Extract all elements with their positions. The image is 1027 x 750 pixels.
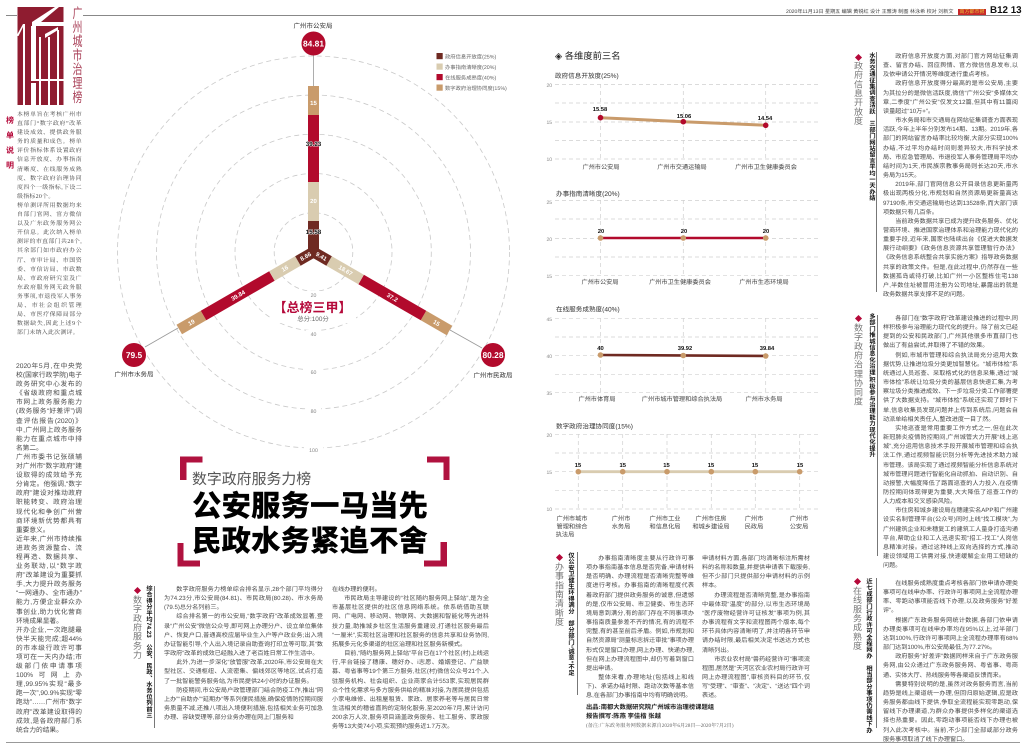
body text: 需要特别说明的是,虽然对政务服务而言,当前趋势是线上渠道统一办理,但回归原始逻辑,应是政务服务都由线下提供,争取全流程能实现零跑动,保留线下办理渠道,为群众办事提供多样化的渠道选择也热重要。因此,零跑动事项能否线下办理也被列入此次考核中。当前,不少部门全部或部分政务服务事项取消了线下办理窗口。 bbox=[883, 681, 1018, 743]
chart: 政府信息开放度: 广州市交通运输局 bbox=[657, 163, 707, 171]
bottom rule bbox=[6, 742, 1020, 743]
chart: 数字政府治理协同度: 公安局 bbox=[790, 522, 808, 530]
corner brackets bbox=[178, 456, 450, 566]
chart: 政府信息开放度: 政府信息开放度(25%) bbox=[555, 72, 619, 80]
source credits: 报告撰写:陈燕 李佳楷 张越 bbox=[586, 713, 661, 720]
chart: 政府信息开放度: 20 bbox=[546, 83, 552, 89]
body text: 例如,市城市管理和综合执法局充分运用大数据优势,让推进垃圾分类更加智慧化。“城市体检”系统通过人员巡查、采取格式化的信息采集,通过“城市体检”系统让垃圾分类的基层信息快速汇集,为考察垃圾分类推进成效、下一步垃圾分类工作部署提供了大数据支持。“城市体检”系统还实现了即时下单,信息收集员发现问题并上传到系统后,问题会自动派单给相关责任人,整改进度一目了然。 bbox=[883, 352, 1018, 423]
text block: ranking notes bbox=[17, 111, 82, 336]
body text: 在线服务成熟度重点考核各部门依申请办理类事项可在线申办率、行政许可事项网上全流程办理率、零跑动事项能否线下办理,以及政务服务“好差评”。 bbox=[883, 580, 1018, 614]
arm: 民政局 bbox=[311, 247, 452, 335]
chart: 数字政府治理协同度: 20 bbox=[546, 433, 552, 439]
masthead vertical title: 广州城市治理榜 bbox=[71, 6, 82, 104]
arm: 水务局: 39.84 bbox=[230, 289, 247, 303]
chart: 办事指南清晰度: 20 bbox=[598, 228, 604, 235]
body text column 2: 在线办理的便利。 bbox=[332, 586, 381, 593]
top rule bbox=[83, 15, 1020, 16]
score bubble: 民政局: 广州市民政局 bbox=[474, 372, 512, 380]
section subhead: 近七成部门行政许可全程网办 相当部分事项仍需线下办 bbox=[865, 578, 872, 733]
body text column 2 bbox=[332, 586, 489, 730]
body text column 1: 综合排名第一的市公安局,“数字政府”改革成效显著,登录“广州公安”微信公众号,即可网上办理分户、设立单位集体户、恢复户口,普通高校应届毕业生入户等户政业务;出入境办证智能引导,个人出入境记录自助查询打印立等可取,其“数字政府”改革的成效已经融入进了老百姓日常工作生活中。 bbox=[164, 613, 323, 657]
score bubble: 公安局: 84.81 bbox=[303, 38, 324, 48]
rule bbox=[876, 52, 877, 292]
chart: 数字政府治理协同度: 和信息化局 bbox=[650, 522, 680, 530]
body text column 2: 办理流程是否清晰完整,是办事指南中最体现“温度”的部分,以市生态环境局“医疗废物经营许可证核发”事项为例,其办事流程有文字和流程图两个版本,每个环节具体内容清晰明了,并注明各环节申请办结时限,最后相关决定书送达方式也清晰列出。 bbox=[702, 592, 810, 654]
chart centre label: 总分:100分 bbox=[297, 315, 329, 323]
score bubble: 公安局: 广州市公安局 bbox=[294, 22, 332, 30]
chart: 数字政府治理协同度: 管理和综合 bbox=[557, 522, 587, 530]
ring labels: 60 bbox=[311, 370, 316, 376]
chart centre label bbox=[272, 299, 356, 323]
chart: 数字政府治理协同度: 10 bbox=[546, 507, 552, 513]
arm: 水务局 bbox=[177, 247, 316, 334]
arm: 公安局: 15 bbox=[310, 100, 317, 107]
chart: 办事指南清晰度: 15 bbox=[546, 274, 552, 280]
chart: 数字政府治理协同度: 广州市 bbox=[745, 514, 763, 522]
chart: 政府信息开放度: 15.06 bbox=[677, 113, 692, 120]
chart: 办事指南清晰度: 广州市卫生健康委员会 bbox=[649, 278, 711, 286]
chart: 办事指南清晰度 bbox=[546, 190, 821, 286]
body text column 1 bbox=[164, 586, 323, 721]
chart: 在线服务成熟度: 45 bbox=[546, 317, 552, 323]
body text column 2 bbox=[702, 554, 810, 699]
side label: 榜单说明: 榜单说明 bbox=[6, 116, 14, 170]
chart: 在线服务成熟度: 广州市水务局 bbox=[745, 395, 783, 403]
chart: 办事指南清晰度: 办事指南清晰度(20%) bbox=[556, 190, 620, 198]
chart: 在线服务成熟度: 39.84 bbox=[760, 345, 775, 352]
body text: 实地巡查是常用重要工作方式之一,但在此次新冠肺炎疫情防控期间,广州城管大力开展“线上巡城”,充分运用信息技术手段开展城市管理和综合执法工作,通过视频智能识别分析等先进技术助力城市管理。该局实现了通过视频智能分析信息系统对城市管理问题进行智能化自动抓拍、自动识别、自动报警,大幅度降低了路面巡查的人力投入,在疫情防控期间体现得更为重要,大大降低了巡查工作的人力成本和交叉感染风险。 bbox=[883, 425, 1018, 505]
panel: 数字政府服务力 bbox=[132, 585, 489, 730]
section label: 在线服务成熟度 bbox=[852, 586, 862, 650]
score bubble: 水务局 bbox=[114, 343, 154, 378]
arm: 民政局: 15 bbox=[432, 319, 441, 328]
score bubble: 水务局: 79.5 bbox=[126, 350, 142, 360]
page header: red tag: 南方都市报 bbox=[959, 8, 984, 14]
body text column 1: 办事指南清晰度主要从行政许可事项办事指南基本信息是否完备,申请材料是否明确、办理流程是否清晰完整等维度进行考核。办事指南的清晰程度代表着政府部门提供政务服务的诚意,但遗憾的是,仅市公安局、市卫健委、市生态环境局意到满分,有的部门存在不同事项办事指南质量参差不齐的情况,有的流程不完整,有的甚至前后矛盾。例如,市规划和自然资源局“测量标志拆迁审批”事项办理形式仅是窗口办理,网上办理、快递办理,但在网上办理流程图中,却仍写着到窗口提出申请。 bbox=[586, 555, 694, 672]
panel: 在线服务成熟度 bbox=[852, 578, 1018, 743]
chart: 在线服务成熟度 bbox=[546, 306, 821, 403]
section subhead: 水务交通征集调查活跃 三部门网站留言平均一天办结 bbox=[868, 52, 875, 201]
body text: 当前政务数据共享已成为提升政务服务、优化营商环境、推进国家治理体系和治理能力现代化的重要手段,近年来,国家也陆续出台《促进大数据发展行动纲要》《政务信息资源共享管理暂行办法》《政务信息系统整合共享实施方案》指导政务数据共享的政策文件。但是,在此过程中,仍然存在一些数据孤岛或待打破,比如广州一小区整栋住宅138户,半数住址被冒用注册为公司地址,暴露出的就是政务数据共享支撑不足的问题。 bbox=[883, 218, 1018, 298]
masthead logo bbox=[18, 7, 64, 105]
arm: 水务局: 8.66 bbox=[299, 251, 313, 263]
chart: 数字政府治理协同度: 执法局 bbox=[556, 530, 574, 538]
body text: 政府信息开放度方面,对部门官方网站征集调查、留言办结、回应舆情、官方微信信息发布,以及依申请公开情况等维度进行重点考核。 bbox=[883, 53, 1018, 78]
body text column 1: 防疫期间,市公安局户政管理部门结合防疫工作,推出“网上办”“自助办”“延期办”等系列便民措施,确保疫情防控期间服务质量不减,还推八项出入境便利措施,包括相关业务可加急办理、容缺受理等,部分业务办理在网上门服务和 bbox=[164, 687, 323, 721]
marker bbox=[556, 554, 563, 561]
chart centre label: 【总榜三甲】 bbox=[273, 300, 352, 315]
source credits: 出品:南都大数据研究院广州城市治理榜课题组 bbox=[586, 704, 714, 711]
text block: intro bbox=[16, 362, 82, 734]
chart: 数字政府治理协同度: 广州市 bbox=[612, 514, 630, 522]
arm: 民政局: 18.67 bbox=[337, 264, 354, 278]
score bubble: 水务局: 广州市水务局 bbox=[114, 370, 154, 378]
chart: 政府信息开放度: 广州市卫生健康委员会 bbox=[735, 163, 797, 171]
chart: 数字政府治理协同度: 15 bbox=[546, 470, 552, 476]
section title: 各维度前三名: ◈ 各维度前三名 bbox=[555, 51, 621, 61]
chart: 政府信息开放度: 广州市公安局 bbox=[582, 163, 620, 171]
rule bbox=[577, 552, 578, 695]
text block: intro: 近年来,广州市持续推进政务资源整合、流程再造、数据共享、业务联动,以“数字政府”改革建设为重要抓手,大力提升政务服务“一网通办、全市通办”能力,方便企业群众办事创业,助力优化营商环境成果显著。 bbox=[16, 536, 82, 625]
headline main bbox=[192, 490, 428, 558]
score bubble: 民政局 bbox=[474, 343, 512, 380]
chart: 数字政府治理协同度: 民政局 bbox=[745, 522, 763, 530]
body text: 2019年,部门官网信息公开目录信息更新量两极出现两极分化,市规划和自然资源局更新量高达97190条,市交通运输局也达到13528条,而大部门该项数据只有几百条。 bbox=[883, 181, 1018, 216]
body text column 1: 整体来看,办理地址(包括线上和线下)、承诺办结时限、跑动次数等基本信息,在各部门办事指南中均有明确说明。 bbox=[586, 674, 694, 699]
chart: 在线服务成熟度: 广州市体育局 bbox=[578, 395, 616, 403]
ring labels: 100 bbox=[309, 448, 318, 454]
chart: 办事指南清晰度: 广州市生态环境局 bbox=[739, 278, 789, 286]
ring labels: 40 bbox=[311, 332, 316, 338]
rings bbox=[118, 56, 510, 448]
connectors bbox=[145, 55, 482, 348]
headline bbox=[178, 456, 450, 566]
legend bbox=[436, 53, 507, 92]
chart: 在线服务成熟度: 40 bbox=[546, 354, 552, 360]
marker bbox=[855, 315, 862, 322]
panel: 政府信息开放度 bbox=[853, 52, 1018, 298]
chart: 政府信息开放度: 15.58 bbox=[593, 106, 608, 113]
chart: 政府信息开放度: 10 bbox=[546, 157, 552, 163]
arm: 水务局: 16 bbox=[281, 264, 290, 274]
body text: 政府服务“好差评”数据同样来自于广东政务服务网,由公众通过广东政务服务网、粤省事、粤商通、实体大厅、热线服务等各渠道反馈而来。 bbox=[883, 653, 1018, 679]
chart: 数字政府治理协同度: 15 bbox=[752, 463, 759, 469]
ring labels: 20 bbox=[311, 293, 316, 299]
arm: 水务局: 19 bbox=[187, 318, 197, 328]
chart: 办事指南清晰度: 20 bbox=[681, 228, 687, 235]
chart: 在线服务成熟度: 在线服务成熟度(40%) bbox=[556, 306, 620, 314]
body text column 1: 此外,为进一步深化“放管服”改革,2020年,市公安局在大型社区、交通枢纽、人流密集、偏线郊区等地区,试点打造了一批智能警务服务站,为市民提供24小时的办证服务。 bbox=[164, 659, 323, 685]
panel: 数字政府治理协同度 bbox=[853, 313, 1018, 569]
body text: 根据广东政务服务网统计数据,各部门依申请办理类事项可在线申办率均在95%以上,过半部门达到100%,行政许可事项网上全流程办理率有68%部门达到100%,市公安局最低,为77.27%。 bbox=[883, 617, 1018, 651]
rule bbox=[154, 586, 155, 728]
ring labels bbox=[304, 291, 323, 454]
chart: 在线服务成熟度: 35 bbox=[546, 391, 552, 397]
headline main: 民政水务紧追不舍 bbox=[192, 525, 428, 558]
marker bbox=[134, 587, 141, 594]
body text column 2: 市民政局主导建设的“社区随约服务网上驿站”,是为全市基层社区提供的社区信息网络系统。依系统借助互联网、广电网、移动网、物联网、大数据和智能化等先进科技力量,助推城乡社区生活服务重建设,打通社区服务最后“一厘米”,实现社区治理和社区服务的信息共享和业务协同,拓展多元化多渠道的社区治理和社区服务新模式。 bbox=[332, 595, 489, 648]
body text bbox=[883, 52, 1018, 298]
chart: 数字政府治理协同度: 15 bbox=[575, 463, 582, 469]
text block: intro: 广州市委书记张硕辅对广州市“数字政府”建设取得的成效给予充分肯定。他强调,“数字政府”建设对推动政府职能转变、政府治理现代化和争创广州营商环境新优势都具有重要意义。 bbox=[16, 454, 82, 534]
text block: intro: 2020年5月,在中央党校(国家行政学院)电子政务研究中心发布的《省级政府和重点城市网上政务服务能力(政务服务“好差评”)调查评估报告(2020)》中,广州网上政务服务能力在重点城市中排名第二。 bbox=[16, 363, 82, 452]
score bubble: 民政局: 80.28 bbox=[483, 350, 504, 360]
arm: 民政局: 9.41 bbox=[314, 251, 328, 263]
body text: 政府信息开放度得分最高的是市公安局,主要为其拉分的是微信活跃度,微信“广州公安”多媒体文章,二季度“广州公安”仅发文12篇,但其中有11篇阅读量超过“10万+”。 bbox=[883, 80, 1018, 115]
text block: intro: 开办企业,一次跑腿最快半天能完成;超44%的市本级行政许可事项可在一天内办结;市级部门依申请事项100%可网上办理,99.95%实现“最多跑一次”,90.9%实现“零跑动”……广州市“数字政府”改革建设取得的成效,是各政府部门系统合力的结果。 bbox=[16, 627, 82, 734]
headline main: 公安服务一马当先 bbox=[192, 490, 428, 523]
legend: 在线服务成熟度(40%) bbox=[445, 74, 496, 82]
section label: 数字政府治理协同度 bbox=[853, 323, 863, 406]
marker bbox=[855, 54, 862, 61]
rule bbox=[876, 578, 877, 728]
chart: 在线服务成熟度: 40 bbox=[597, 345, 604, 352]
chart: 办事指南清晰度: 25 bbox=[546, 200, 552, 206]
text block: ranking notes: 本榜单旨在考核广州市直部门“数字政府”改革建设成效、提供政务服务的质量和成色。榜单评价指标体系设置政府信息开放度、办事指南清晰度、在线服务成熟度、数字政府治理协同度四个一级指标,下设二级指标20个。 bbox=[17, 112, 82, 200]
chart: 办事指南清晰度: 20 bbox=[546, 237, 552, 243]
chart: 数字政府治理协同度: 广州市城市 bbox=[557, 514, 587, 522]
chart: 数字政府治理协同度: 15 bbox=[797, 463, 804, 469]
chart: 数字政府治理协同度: 15 bbox=[619, 463, 627, 469]
body text column 2: 市农业农村局“兽药经营许可”事项流程图,居然是“天河区农业农村局行政许可网上办理流程图”,审核资料目的环节,仅写“受理”、“审查”、“决定”、“送达”四个词表述。 bbox=[702, 656, 810, 699]
chart: 数字政府治理协同度: 15 bbox=[663, 463, 670, 469]
chart: 数字政府治理协同度: 和城乡建设局 bbox=[692, 522, 730, 530]
section subhead: 仅公安卫健生环得满分 部分部门“诚意”不足 bbox=[567, 552, 574, 676]
chart: 办事指南清晰度: 20 bbox=[763, 228, 769, 235]
section label: 数字政府服务力 bbox=[132, 595, 142, 659]
body text: 市住房和城乡建设局在穗建实名APP和广州建设实名制管理平台(公众号)同时上线“找工模块”,为广州建筑企业和未穗复工的建筑工人量身打造沟通平台,帮助企业和工人迅速实现“招工-找工”人岗信息精准对接。通过这种线上双向选择的方式,推动建设领域用工供需对接,快速缓解企业用工短缺的问题。 bbox=[883, 507, 1018, 569]
panel: 办事指南清晰度 bbox=[554, 552, 810, 729]
arm: 公安局: 39.23 bbox=[306, 141, 322, 148]
section subhead: 多部门推城信息化治理,积极参与治理能力现代化提升 bbox=[868, 313, 875, 457]
body text column 1: 数字政府服务力榜单综合排名显示,28个部门平均得分为74.23分,市公安局(84.81)、市民政局(80.28)、市水务局(79.5)总分名列前三。 bbox=[164, 586, 323, 611]
source credits: (备注:广东政务服务网数据来源自2020年6月28日—2020年7月2日) bbox=[586, 723, 734, 729]
chart: 数字政府治理协同度 bbox=[546, 422, 821, 538]
arm: 公安局: 20 bbox=[310, 198, 317, 205]
chart: 在线服务成熟度: 39.92 bbox=[678, 345, 692, 352]
ring labels: 80 bbox=[311, 409, 316, 415]
chart: radial stacked score bars bbox=[114, 22, 512, 454]
source credits bbox=[586, 704, 734, 729]
chart: 数字政府治理协同度: 广州市住房 bbox=[696, 514, 726, 522]
headline kicker: 数字政府服务力榜 bbox=[192, 472, 311, 488]
body text: 市水务局和市交通局在网站征集调查方面表现活跃,今年上半年分别发布14期、13期。2019年,各部门的网站留言办结率比较均衡,大部分实现100%办结,不过平均办结时间则差异较大,市科学技术局、市应急管理局、市退役军人事务管理局平均办结时间为1天,市民族宗教事务局则长达20天,市水务局为15天。 bbox=[883, 117, 1018, 179]
text block: ranking notes: 榜单测评所用数据均来自部门官网、官方微信以及广东政务服务网公开信息。此次纳入榜单测评的市直部门共28个,其余部门如市政府办公厅、市审计局、市国资委、市信访局、市政数局、市政府研究室及广东政府服务网无政务服务事项,市退役军人事务局、市社会组织管理局、市医疗保障局部分数据缺失,因此上述9个部门未纳入此次测评。 bbox=[17, 203, 82, 336]
arm: 公安局 bbox=[306, 86, 322, 252]
rule bbox=[877, 315, 878, 556]
body text bbox=[883, 314, 1018, 569]
chart: 在线服务成熟度: 广州市城市管理和综合执法局 bbox=[642, 395, 722, 403]
marker bbox=[854, 578, 861, 585]
chart: 办事指南清晰度: 广州市公安局 bbox=[581, 278, 619, 286]
chart: 数字政府治理协同度: 数字政府治理协同度(15%) bbox=[556, 422, 633, 430]
chart: 数字政府治理协同度: 15 bbox=[708, 463, 715, 469]
section label: 办事指南清晰度 bbox=[554, 562, 564, 626]
chart: 数字政府治理协同度: 水务局 bbox=[612, 522, 630, 530]
chart: 数字政府治理协同度: 广州市 bbox=[790, 514, 808, 522]
chart: 政府信息开放度: 15 bbox=[546, 120, 552, 126]
chart: 政府信息开放度 bbox=[546, 72, 821, 171]
body text: 各部门在“数字政府”改革建设推进的过程中,同样积极参与治理能力现代化的提升。除了前文已经提到的公安和民政部门,广州其他很多市直部门也做出了有益尝试,并取得了不错的效果。 bbox=[883, 315, 1018, 349]
legend: 办事指南清晰度(20%) bbox=[445, 64, 496, 71]
section subhead: 综合得分平均74.23 公安、民政、水务位列前三 bbox=[145, 585, 152, 718]
legend: 政府信息开放度(25%) bbox=[445, 54, 496, 61]
legend: 数字政府治理协同度(15%) bbox=[445, 85, 507, 92]
chart: 数字政府治理协同度: 广州市工业 bbox=[650, 514, 680, 522]
arm: 公安局: 15.58 bbox=[306, 229, 322, 236]
body text bbox=[883, 580, 1018, 743]
score bubble: 公安局 bbox=[294, 22, 332, 56]
line charts bbox=[546, 72, 818, 538]
body text column 2: 目前,“随约服务网上驿站”平台已在17个社区(村)上线运行,平台链接了穗康、穗好办、i志愿、婚姻登记、广益联募、粤省事等19个第三方服务,社区(村)微信公众号21个,入驻服务机构、社会组织、企业商家合计553家,实现居民群众个性化需求与多方服务供给的精准对接,为居民提供包括小家电维修、出租屋租赁、家政、居家养老等与居民日常生活相关的穗省直购的定制化服务,至2020年7月,累计访问200余万人次,服务项目涵盖政务服务、社工服务、家政服务等13大类74小项,实现预约服务近1.7万次。 bbox=[332, 650, 489, 730]
body text column 2: 申请材料方面,各部门均清晰标注所需材料的名称和数量,并提供申请表下载服务,但不少部门只提供部分申请材料的示例样本。 bbox=[702, 555, 810, 589]
section label: 政府信息开放度 bbox=[853, 61, 863, 125]
page header: date and editors: 2020年11月13日 星期五 编辑 黄锐红 设计 王雅涛 制图 林泳希 校对 刘新文 bbox=[786, 9, 953, 15]
arm: 民政局: 37.2 bbox=[385, 292, 399, 304]
chart: 政府信息开放度: 14.54 bbox=[758, 116, 773, 122]
page header: page number: B12 13 bbox=[990, 5, 1022, 16]
